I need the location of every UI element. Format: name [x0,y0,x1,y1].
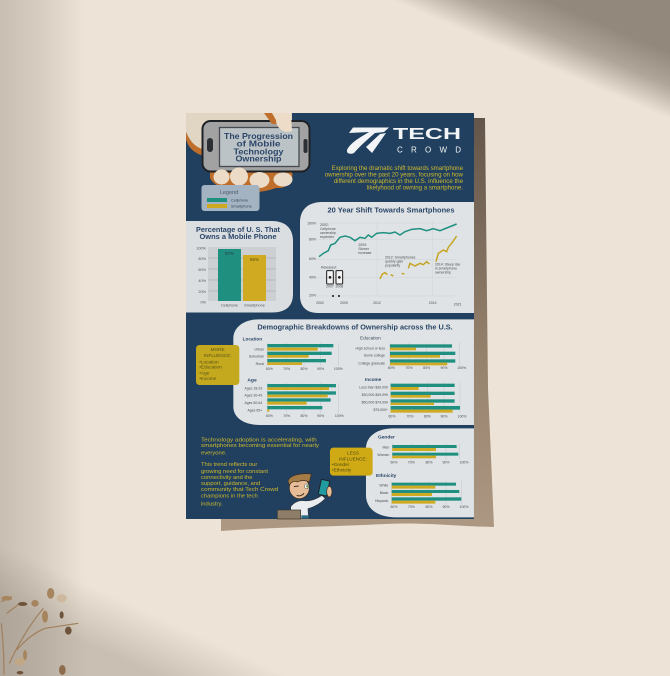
chart: ethnicity: 60% [390,505,397,509]
line chart: in smartphone [435,267,457,271]
line chart: explodes [320,235,334,239]
chart: age: Ages 18-29 [244,386,262,390]
panel: percentage owning a mobile phone [186,221,293,312]
closing text: connectivity and the [201,475,253,481]
chart: gender: 80% [425,460,432,464]
chart: education: High school or less [356,346,385,350]
chart: location: 100% [334,367,343,371]
chart: income: $75,000+ [373,408,388,412]
chart: education: 90% [440,366,447,370]
bar chart: 100% [196,246,207,250]
title: Technology [234,147,284,156]
chart: income: Less than $30,000 [359,386,388,390]
line chart: 2002: [320,223,329,227]
poster background [186,113,474,519]
title: The Progression [224,132,293,141]
chart: age: Ages 65+ [247,408,262,412]
chart: education [356,335,466,370]
chart: education: 60% [388,366,395,370]
line chart: 60% [309,257,316,261]
intro text [325,165,464,192]
bar chart: 20% [198,290,207,294]
chart: age: 60% [266,414,273,418]
chart: ethnicity: White [379,483,388,487]
chart: gender: 100% [460,460,468,464]
closing text: Technology adoption is accelerating, with [201,437,317,443]
intro text: Exploring the dramatic shift towards smartphone [332,165,464,172]
chart: location: 70% [283,367,290,371]
chart: gender: Woman [377,453,389,457]
closing text [201,437,319,507]
title [224,132,293,164]
line chart: 2021 [454,302,462,306]
chart: gender: 90% [442,460,449,464]
panel: gender and ethnicity [366,428,474,517]
chart: age: Ages 30-49 [244,394,262,398]
bar chart: Smartphone [244,304,265,308]
chart: ethnicity: Ethnicity [376,473,397,479]
closing text: growing need for constant [201,469,268,475]
logo: Tech Crowd [347,126,461,154]
legend: Legend [220,190,238,196]
chart: education: Education [360,335,381,340]
callout: more influence: •Age [199,370,210,375]
panel heading: Demographic Breakdowns of Ownership across the U.S. [257,322,453,331]
line chart: 2012: Smartphones [385,256,416,260]
callout: more influence: MORE [211,347,225,352]
chart: income: Income [365,377,382,382]
callout: less influence: INFLUENCE: [339,456,367,461]
intro text: ownership over the past 20 years, focusing on how [325,172,464,178]
chart: gender: Man [383,446,389,450]
icon: released phones: 2007 [326,285,334,289]
bar chart: Cellphone [221,304,238,308]
bar chart: 60% [198,268,207,272]
line chart: increase [358,251,372,255]
title: of Mobile [236,140,281,149]
dried plant [1,588,78,675]
line chart [307,221,462,306]
line chart: Cellphone [320,227,336,231]
phone illustration [202,121,310,172]
chart: ethnicity: 90% [442,505,449,509]
callout: less influence: •Gender [332,462,350,467]
line chart: quickly gain [385,260,403,264]
callout: less influence: •Ethnicity [332,468,352,473]
chart: gender: Gender [378,434,395,440]
panel heading: Percentage of U. S. That [196,227,281,234]
chart: education: College graduate [358,361,385,365]
line chart: Released: [321,266,337,270]
legend [202,185,260,211]
line chart: 2014 [429,301,437,305]
bar chart: 0% [200,300,207,304]
callout: less influence: LESS [347,451,359,456]
closing text: This trend reflects our [201,462,257,468]
chart: income: 70% [406,414,413,418]
hand palm behind the phone [186,113,292,192]
chart: age: 90% [317,414,324,418]
closing text: support, guidance, and [201,481,260,487]
chart: ethnicity: 70% [408,505,415,509]
chart: education: Some college [364,354,385,358]
bar chart [196,246,276,308]
line chart: 80% [309,238,316,242]
logo: Tech Crowd: CROWD [397,146,461,154]
callout: more influence: •Income [199,376,217,381]
chart: education: 100% [457,366,466,370]
chart: age: 80% [300,414,307,418]
chart: income: 60% [388,414,395,418]
panel heading [196,227,281,241]
callout: less influence [330,448,373,476]
chart: ethnicity: 80% [425,505,432,509]
line chart: 2009: [358,243,367,247]
chart: location: Urban [254,347,264,351]
bar chart: 97% [225,251,234,256]
intro text: likelyhood of owning a smartphone. [367,184,463,192]
chart: gender: 60% [390,460,397,464]
chart: income [359,377,466,418]
panel heading: Owns a Mobile Phone [200,234,277,241]
chart: location: Location [243,336,262,341]
closing text: champions in the tech [201,494,258,500]
panel: 20 year shift [300,202,474,313]
closing text: community that Tech Crowd [201,487,278,493]
chart: ethnicity: 100% [460,505,468,509]
logo: Tech Crowd: TECH [393,126,461,143]
callout: more influence: INFLUENCE: [204,353,232,358]
line chart: ownership [435,271,451,275]
chart: age [244,378,344,418]
legend: Smartphone [231,204,252,208]
bar chart: 80% [198,257,207,261]
legend: Cellphone [231,198,248,202]
chart: location: 80% [300,367,307,371]
line chart: 40% [309,276,316,280]
line chart: ownership [320,231,336,235]
line chart: 100% [307,221,316,225]
line chart: 2014: Steep rise [435,263,460,267]
callout: more influence [196,345,239,385]
chart: gender: 70% [408,460,415,464]
bar chart: 40% [198,279,207,283]
mascot with phone and laptop [277,474,332,519]
closing text: industry. [201,501,223,507]
chart: ethnicity: Black [380,491,389,495]
chart: income: $50,000-$74,999 [362,401,388,405]
line chart: 2012 [373,301,381,305]
icon: released phones: 2008 [335,285,343,289]
chart: ethnicity [375,473,468,509]
closing text: everyone. [201,451,227,457]
chart: gender [377,434,468,464]
poster drop shadow [221,118,494,531]
chart: income: 80% [424,414,431,418]
bar chart: 85% [250,257,259,262]
icon: released phones [326,271,343,297]
line chart: 20% [309,294,316,298]
intro text: different demographics in the U.S. influence the [334,178,464,185]
chart: location: Rural [256,362,264,366]
closing text: smartphones becoming essential for nearly [201,443,319,449]
line chart: Slower [358,247,370,251]
callout: more influence: •Location [199,359,219,364]
chart: income: 90% [440,414,447,418]
chart: education: 70% [405,366,412,370]
chart: education: 80% [423,366,430,370]
chart: age: Ages 50-64 [244,401,262,405]
line chart: popularity [385,264,400,268]
panel: demographic breakdowns [233,319,474,425]
line chart: 2009 [340,301,348,305]
panel heading: 20 Year Shift Towards Smartphones [328,206,454,214]
chart: age: 100% [335,414,344,418]
fingers and thumb over the phone [214,113,292,188]
chart: location [243,336,343,371]
chart: ethnicity: Hispanic [375,499,389,503]
chart: age: Age [247,378,257,384]
chart: location: Suburban [249,355,264,359]
chart: location: 60% [266,367,273,371]
callout: more influence: •Education [199,365,222,370]
chart: income: $30,000-$49,999 [362,393,388,397]
chart: age: 70% [283,414,290,418]
chart: location: 90% [317,367,324,371]
title: Ownership [236,155,282,164]
chart: income: 100% [458,414,466,418]
line chart: 2002 [316,301,324,305]
